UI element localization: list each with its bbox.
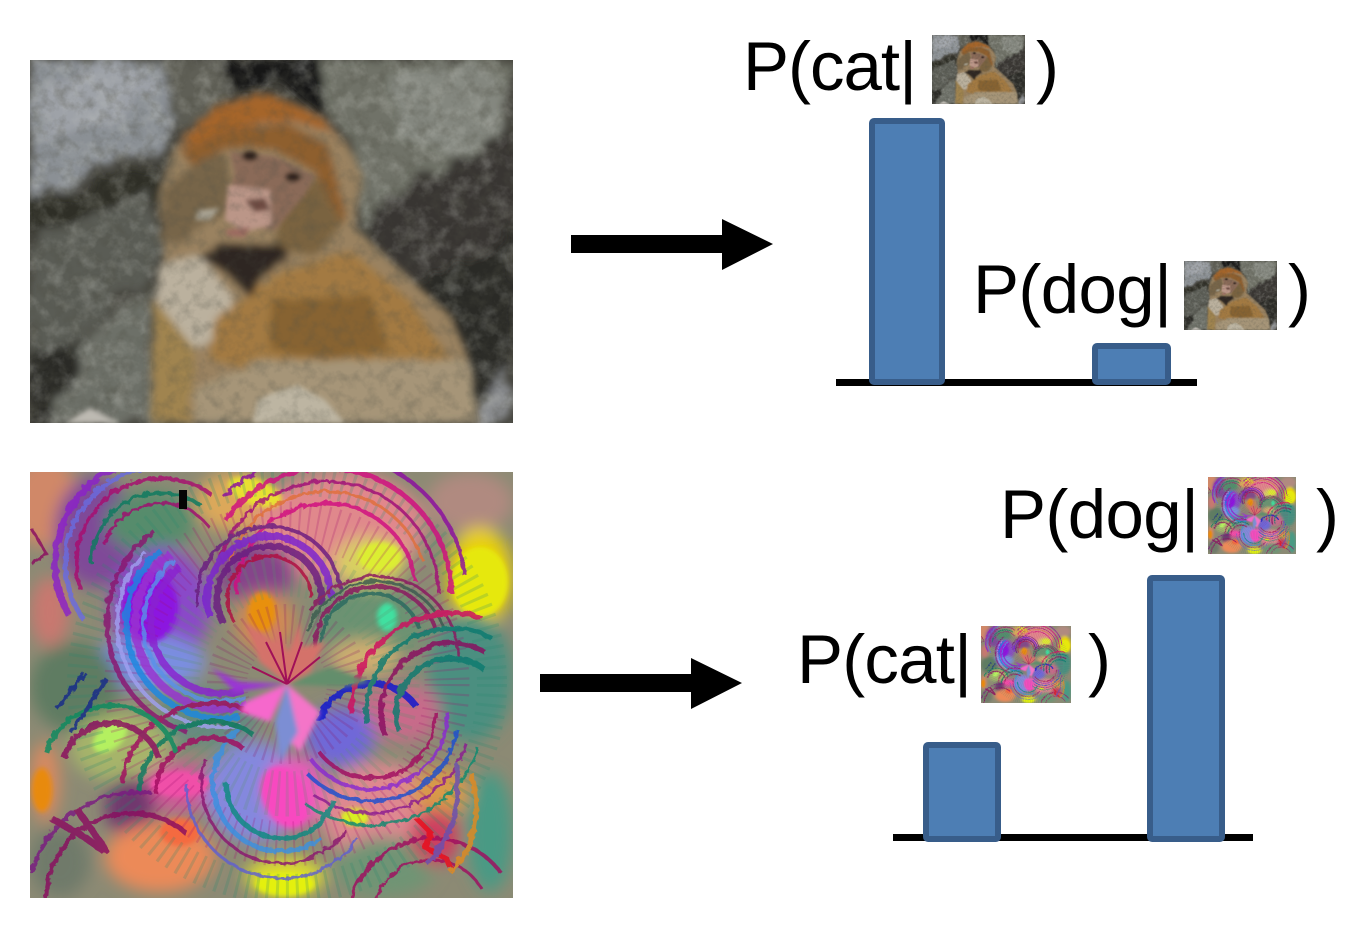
photo: adversarial swirl noise image <box>10 452 550 898</box>
label: P(dog | swirl image): ) <box>1316 476 1339 553</box>
label: P(dog | swirl image): P(dog| <box>1000 476 1199 553</box>
thumbnail: macaque <box>932 35 1025 104</box>
label: P(cat | macaque): ) <box>1036 28 1059 105</box>
bar: cat probability high <box>872 121 942 382</box>
label: P(cat | macaque) <box>743 28 1059 105</box>
bar chart: macaque predictions <box>836 121 1197 386</box>
axis line <box>893 834 1253 841</box>
bar: cat probability medium <box>926 745 998 839</box>
bar: dog probability low <box>1095 346 1168 382</box>
bar chart: swirl image predictions <box>893 578 1253 841</box>
label: P(cat | swirl image): P(cat| <box>797 621 972 698</box>
thumbnail: swirl image <box>1204 473 1303 554</box>
bar: dog probability high <box>1150 578 1222 839</box>
label: P(dog | macaque): P(dog| <box>973 251 1172 328</box>
thumbnail: swirl image <box>977 622 1078 703</box>
thumbnail: macaque <box>1184 261 1277 330</box>
label: P(dog | macaque) <box>973 251 1311 330</box>
label: P(cat | swirl image) <box>797 621 1111 703</box>
label: P(cat | swirl image): ) <box>1088 621 1111 698</box>
label: P(cat | macaque): P(cat| <box>743 28 917 105</box>
photo: Barbary macaque on rocks <box>30 60 513 423</box>
arrow: macaque photo to prediction <box>571 219 773 270</box>
small black mark in swirl image <box>179 490 187 509</box>
arrow: swirl image to prediction <box>540 658 742 709</box>
label: P(dog | swirl image) <box>1000 473 1339 554</box>
axis line <box>836 379 1197 386</box>
label: P(dog | macaque): ) <box>1288 251 1311 328</box>
